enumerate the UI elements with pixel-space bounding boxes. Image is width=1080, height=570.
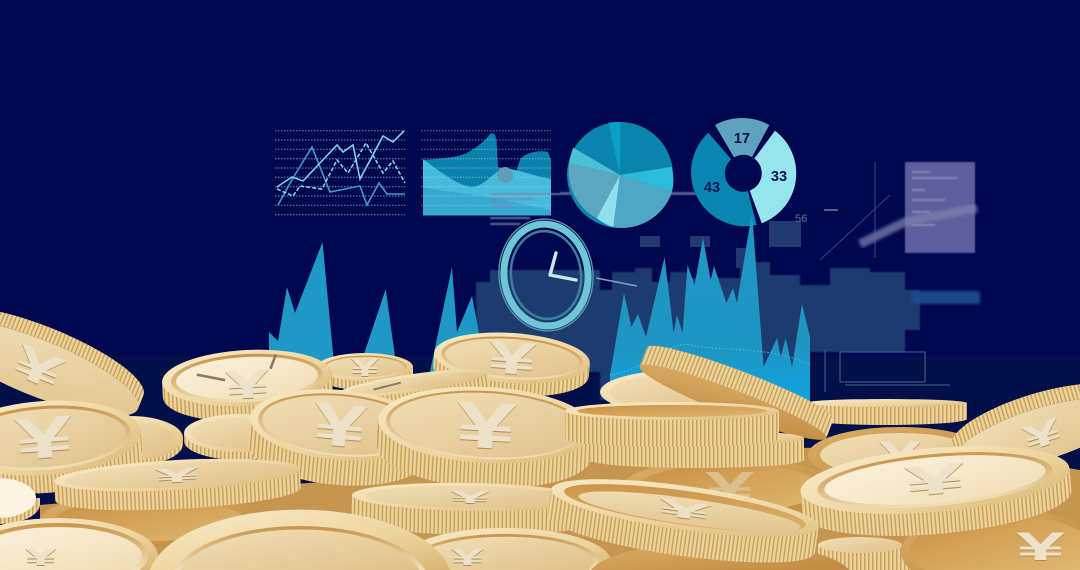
- faint data backdrop: [476, 162, 950, 400]
- ghost document panel: [860, 162, 980, 304]
- pie chart: [567, 122, 673, 228]
- coin main right: [798, 436, 1074, 546]
- coin dark center right: ¥: [706, 462, 755, 511]
- coin thin left: [53, 454, 302, 515]
- coin center lower: [351, 481, 588, 537]
- coin bottom center: ¥: [451, 543, 485, 570]
- coin left: [0, 394, 145, 500]
- coin back: [317, 353, 413, 390]
- coin dark bottom middle: [591, 542, 849, 570]
- coin center: ¥: [454, 387, 518, 464]
- line chart: [275, 131, 405, 215]
- coin right under main: [808, 427, 992, 483]
- coin slanted ridge top: [635, 336, 838, 450]
- coin right under main: ¥: [879, 433, 921, 478]
- coin pile: [0, 289, 1080, 570]
- coin bottom right: ¥: [1016, 524, 1065, 569]
- coin center left large: [245, 382, 433, 493]
- coin dark lower left: [40, 493, 260, 547]
- coin thin left: ¥: [154, 463, 201, 488]
- value 43: 43: [704, 180, 720, 196]
- segment 43: [691, 133, 757, 226]
- coin center: [375, 381, 596, 494]
- segment 33: [743, 131, 796, 223]
- coin upper stacked: [565, 402, 779, 447]
- coin upper left: [161, 346, 334, 425]
- value 17: 17: [734, 131, 750, 147]
- clock hands: [550, 253, 576, 280]
- coin flat right: [805, 399, 967, 425]
- blue peaks left: [269, 242, 479, 381]
- coin lower stacked: [590, 430, 804, 468]
- area chart: [421, 131, 560, 224]
- coin dark center right: [622, 458, 838, 518]
- coin right behind: [600, 370, 760, 414]
- faint data backdrop: 56: [795, 213, 807, 225]
- coin back right: [432, 327, 592, 401]
- coin center left large: ¥: [310, 390, 370, 461]
- coin bottom center: [399, 528, 611, 570]
- coin back: ¥: [351, 353, 380, 382]
- blue peaks right: [610, 212, 810, 425]
- clock: [493, 214, 637, 336]
- coin lower center right: [545, 467, 822, 570]
- coin center lower: ¥: [450, 487, 490, 507]
- coin thin slanted: [337, 364, 490, 415]
- coin center left behind: [184, 414, 296, 460]
- coin bottom left: [0, 518, 158, 570]
- coin bottom right: [901, 510, 1080, 570]
- coin lower center right: ¥: [656, 493, 713, 527]
- coin right tilted: [944, 368, 1080, 485]
- value 33: 33: [771, 169, 787, 185]
- pile shadow base: [40, 448, 1080, 570]
- coin white left edge: [0, 478, 40, 524]
- coin main right: ¥: [903, 453, 967, 506]
- coin bottom left: ¥: [25, 544, 57, 570]
- coin bottom large: [150, 510, 450, 570]
- coin back right: ¥: [486, 331, 538, 386]
- coin top left tilted: ¥: [6, 334, 71, 400]
- coin small lower middle: [818, 537, 902, 570]
- coin left behind: [77, 416, 183, 466]
- coin left: ¥: [13, 404, 75, 472]
- donut chart: [691, 118, 796, 226]
- segment 17: [715, 118, 769, 173]
- coin right tilted: ¥: [1019, 411, 1066, 458]
- coin upper left: ¥: [224, 361, 271, 408]
- donut hole: [725, 155, 762, 192]
- coin top left tilted: [0, 289, 154, 434]
